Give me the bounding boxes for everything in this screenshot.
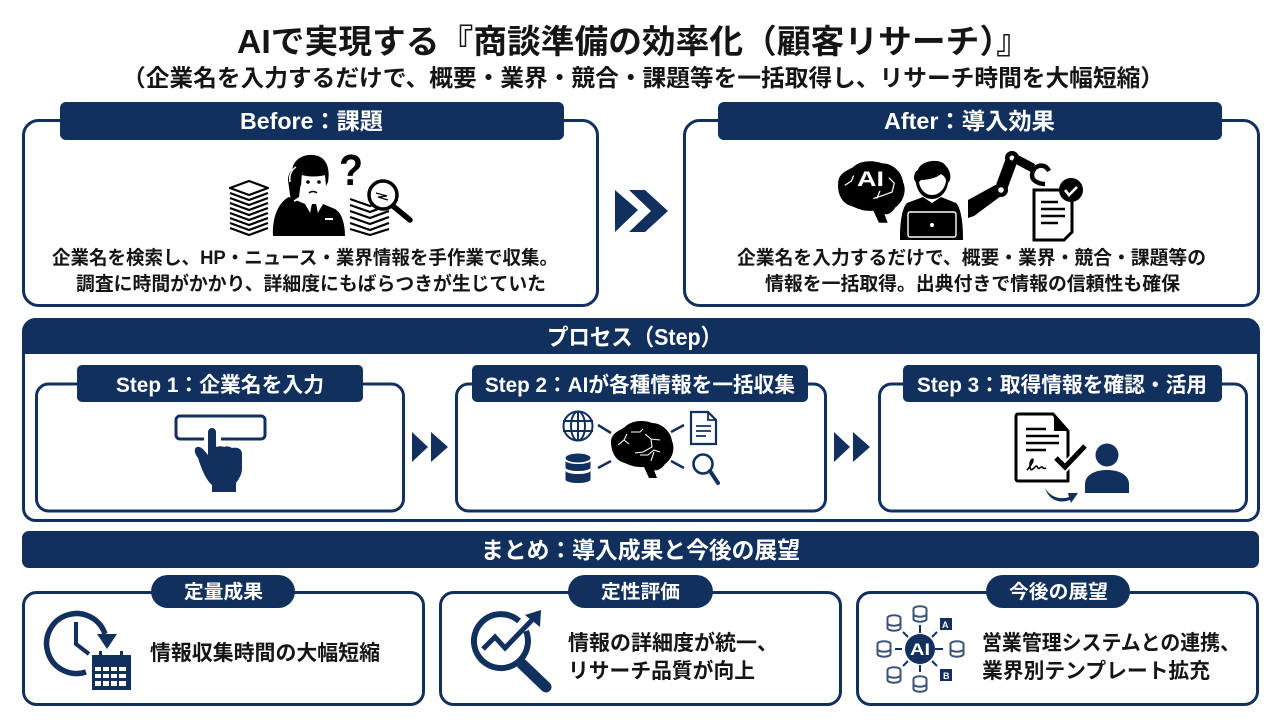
step 3 heading: Step 3：取得情報を確認・活用 (917, 374, 1207, 397)
icon: worried person with paper stacks: ? (339, 146, 363, 195)
pill: qualitative (568, 575, 713, 608)
arrow: step 2 to step 3 (834, 432, 870, 462)
before text (52, 247, 558, 295)
icon: AI hub with databases: AI (910, 640, 930, 659)
before heading (60, 102, 564, 140)
pill: qualitative: 定性評価 (601, 581, 680, 603)
icon: AI, person, robot arm, document (838, 151, 1083, 240)
icon: AI hub with databases: A (942, 620, 949, 630)
before text: 企業名を検索し、HP・ニュース・業界情報を手作業で収集。 (52, 247, 558, 269)
step 2 heading (472, 365, 808, 402)
step 1 (36, 365, 404, 511)
icon: signed document and user (1016, 413, 1129, 503)
process heading (23, 318, 1259, 354)
icon: worried person with paper stacks (230, 146, 410, 236)
panel: process (23, 318, 1259, 520)
step 3 heading (903, 365, 1222, 402)
title: AIで実現する『商談準備の効率化（顧客リサーチ）』 (237, 23, 1030, 60)
step 1 heading: Step 1：企業名を入力 (116, 374, 324, 397)
pill: outlook: 今後の展望 (1009, 581, 1108, 603)
summary heading (22, 531, 1259, 568)
qualitative text: リサーチ品質が向上 (568, 659, 755, 683)
arrow: before to after (615, 190, 668, 232)
quantitative text: 情報収集時間の大幅短縮 (150, 642, 380, 665)
after text (737, 247, 1206, 295)
step 2 (456, 365, 826, 511)
outlook text (982, 632, 1240, 683)
pill: quantitative: 定量成果 (184, 580, 263, 603)
step 3 (880, 365, 1246, 511)
before text: 調査に時間がかかり、詳細度にもばらつきが生じていた (76, 272, 546, 295)
after heading (718, 102, 1222, 140)
panel: qualitative evaluation (440, 575, 840, 704)
summary heading: まとめ：導入成果と今後の展望 (481, 537, 800, 563)
arrow: step 1 to step 2 (412, 432, 448, 462)
icon: AI, person, robot arm, document: AI (857, 168, 884, 191)
subtitle: （企業名を入力するだけで、概要・業界・競合・課題等を一括取得し、リサーチ時間を大幅短縮） (122, 65, 1164, 91)
qualitative text (568, 631, 778, 683)
after text: 情報を一括取得。出典付きで情報の信頼性も確保 (765, 273, 1180, 295)
panel: before (24, 102, 598, 306)
icon: magnifier with rising chart (474, 610, 546, 687)
pill: quantitative (151, 575, 295, 608)
icon: AI brain collecting from sources (563, 411, 718, 483)
icon: finger pressing input box (176, 416, 265, 492)
after text: 企業名を入力するだけで、概要・業界・競合・課題等の (737, 247, 1206, 269)
after heading: After：導入効果 (884, 108, 1055, 134)
step 2 heading: Step 2：AIが各種情報を一括収集 (485, 373, 795, 397)
panel: quantitative results (24, 575, 424, 704)
panel: after (684, 102, 1258, 306)
outlook text: 営業管理システムとの連携、 (982, 632, 1240, 655)
icon: AI hub with databases (878, 606, 964, 692)
panel: future outlook (858, 575, 1258, 704)
process heading: プロセス（Step） (547, 324, 722, 350)
qualitative text: 情報の詳細度が統一、 (568, 631, 778, 655)
icon: clock and calendar (47, 614, 131, 690)
step 1 heading (77, 365, 363, 402)
outlook text: 業界別テンプレート拡充 (982, 660, 1210, 683)
pill: outlook (986, 575, 1130, 608)
before heading: Before：課題 (240, 108, 383, 134)
icon: AI hub with databases: B (943, 671, 950, 681)
